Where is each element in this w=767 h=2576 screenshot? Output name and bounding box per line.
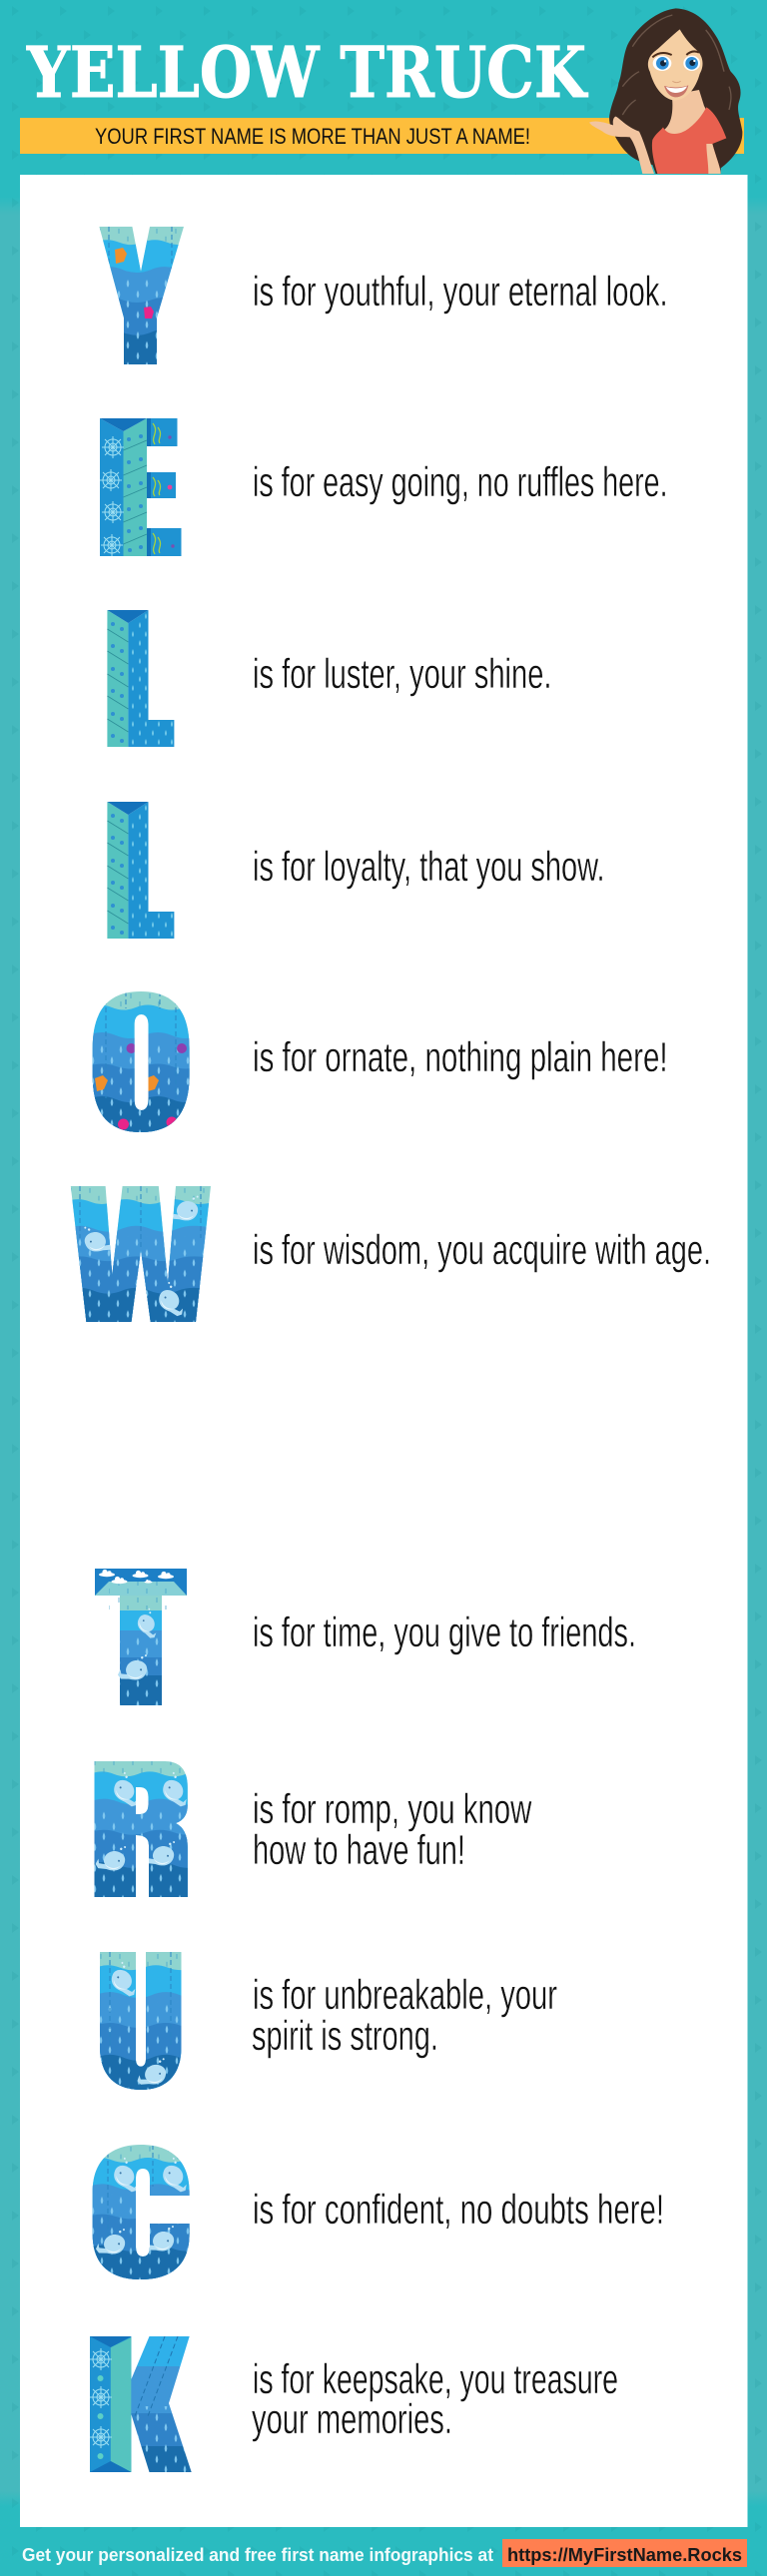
text: first L line: is for luster, your shine. bbox=[253, 650, 551, 697]
footer url button bbox=[502, 2539, 747, 2567]
footer url button: https://MyFirstName.Rocks bbox=[507, 2545, 742, 2565]
icon: ocean letter T bbox=[95, 1569, 187, 1705]
title: YELLOW TRUCK bbox=[26, 31, 588, 114]
icon: ocean letter C bbox=[92, 2145, 190, 2279]
row: first letter L bbox=[107, 610, 552, 747]
icon: ocean letter Y bbox=[100, 227, 184, 364]
icon: cartoon woman presenting bbox=[589, 8, 742, 174]
icon: ocean letter L bbox=[107, 802, 174, 939]
footer call to action: Get your personalized and free first name infographics at bbox=[22, 2545, 493, 2565]
subtitle ribbon: YOUR FIRST NAME IS MORE THAN JUST A NAME! bbox=[95, 124, 530, 149]
row: second letter L bbox=[107, 802, 605, 939]
icon: ocean letter W bbox=[70, 1186, 211, 1322]
icon: ocean letter U bbox=[100, 1952, 182, 2090]
icon: ocean letter K bbox=[90, 2336, 195, 2472]
footer bbox=[22, 2539, 747, 2567]
text: K lines bbox=[252, 2355, 618, 2442]
icon: ocean letter L bbox=[107, 610, 174, 747]
row: letter Y bbox=[95, 225, 668, 367]
text: R lines: how to have fun! bbox=[253, 1826, 465, 1873]
panel: header banner bbox=[20, 8, 744, 174]
subtitle ribbon bbox=[20, 118, 744, 154]
icon: ocean letter O bbox=[92, 991, 190, 1132]
text: U lines: spirit is strong. bbox=[252, 2012, 438, 2059]
row: letter C bbox=[88, 2143, 664, 2282]
text: K lines: your memories. bbox=[252, 2395, 452, 2442]
row: letter U bbox=[96, 1950, 557, 2093]
row: letter O bbox=[88, 989, 668, 1135]
text: R lines bbox=[253, 1785, 532, 1873]
row: letter W bbox=[66, 1184, 711, 1326]
text: U lines: is for unbreakable, your bbox=[253, 1971, 557, 2018]
row: letter R bbox=[90, 1756, 532, 1901]
text: R lines: is for romp, you know bbox=[253, 1785, 532, 1832]
text: U lines bbox=[252, 1971, 557, 2059]
icon: ocean letter R bbox=[94, 1761, 188, 1897]
icon: ocean letter E bbox=[100, 418, 182, 556]
row: letter K bbox=[90, 2336, 618, 2472]
row: letter T bbox=[95, 1569, 636, 1705]
text: second L line: is for loyalty, that you show. bbox=[253, 843, 605, 890]
row: letter E bbox=[100, 418, 668, 556]
